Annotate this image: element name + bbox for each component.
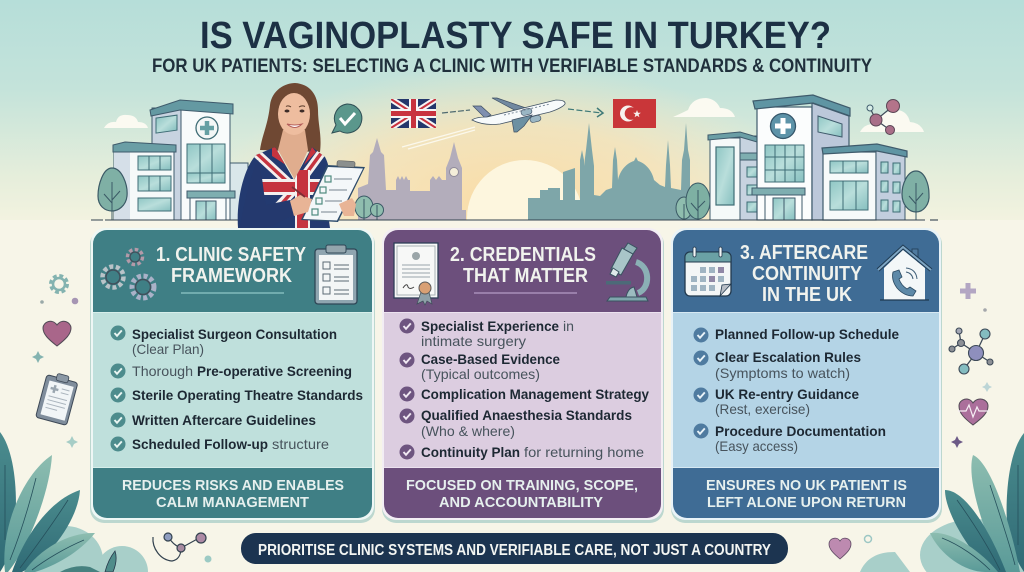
dashed arrow right — [568, 108, 603, 117]
item 3: Sterile Operating Theatre Standards — [132, 387, 363, 403]
dashed route left — [442, 110, 470, 113]
item 3: Complication Management Strategy — [421, 386, 649, 402]
face — [278, 93, 310, 135]
item 2: Pre-operative Screening — [197, 363, 352, 379]
sparkle — [982, 382, 992, 392]
right hospital — [673, 95, 929, 220]
pen — [292, 187, 305, 197]
panel shadow — [671, 230, 942, 523]
Big Ben clock — [450, 168, 458, 176]
item 1: in — [563, 318, 574, 334]
clipboard — [301, 161, 365, 222]
side block — [228, 163, 248, 220]
UK flag — [391, 99, 436, 128]
icon: small heart — [829, 538, 851, 559]
icon: gear — [52, 276, 66, 292]
panel border — [91, 228, 374, 520]
right side decorations — [949, 283, 993, 448]
fringe — [278, 88, 311, 114]
panel body — [93, 310, 372, 470]
icon: calendar — [685, 247, 731, 296]
heading: CONTINUITY — [752, 263, 863, 285]
skyline scene — [355, 124, 710, 220]
woman with clipboard — [236, 83, 365, 230]
panel header — [384, 230, 661, 312]
heading — [450, 244, 596, 287]
icon: checklist clipboard — [315, 245, 357, 304]
jacket — [236, 145, 332, 230]
small trees near London — [355, 196, 384, 220]
item 1: (Clear Plan) — [132, 341, 204, 357]
checklist — [694, 326, 899, 454]
panel footer: REDUCES RISKS AND ENABLES — [122, 477, 344, 494]
icon: heart with pulse — [958, 399, 989, 425]
item 4 — [400, 407, 632, 439]
bottom banner — [241, 533, 788, 564]
center tower — [757, 107, 812, 220]
low block — [114, 148, 174, 220]
cloud — [673, 98, 735, 117]
item 4 — [694, 423, 886, 454]
panel border — [382, 228, 663, 520]
title: IS VAGINOPLASTY SAFE IN TURKEY? — [200, 15, 831, 57]
panel footer: FOCUSED ON TRAINING, SCOPE, — [406, 477, 638, 494]
panel footer — [93, 468, 372, 518]
cross sign — [196, 117, 218, 139]
heading — [740, 242, 868, 306]
panel body — [673, 310, 939, 470]
right wing — [823, 152, 876, 220]
panel body — [384, 310, 661, 470]
tree pair near Istanbul — [676, 183, 710, 220]
heading: 1. CLINIC SAFETY — [156, 244, 307, 266]
icon: gears — [102, 250, 154, 298]
item 4: (Who & where) — [421, 423, 515, 439]
sun — [467, 160, 580, 220]
item 3: UK Re-entry Guidance — [715, 386, 859, 402]
cross sign — [770, 114, 796, 138]
cloud — [104, 115, 148, 128]
icon: molecule — [949, 328, 993, 374]
sparkle — [66, 436, 78, 448]
item 4: Written Aftercare Guidelines — [132, 412, 316, 428]
tall block — [152, 108, 182, 220]
item 1: Specialist Surgeon Consultation — [132, 326, 337, 342]
item 1: Specialist Experience — [421, 318, 559, 334]
airplane — [472, 98, 565, 132]
panel: aftercare continuity — [671, 228, 942, 523]
icon: microscope — [606, 243, 648, 301]
panel shadow — [90, 230, 375, 523]
subtitle: FOR UK PATIENTS: SELECTING A CLINIC WITH VERIFIABLE STANDARDS & CONTINUITY — [152, 56, 872, 77]
item 5 — [110, 436, 329, 452]
item 1: intimate surgery — [421, 333, 526, 349]
icon: heart — [43, 321, 71, 346]
sparkle — [951, 436, 963, 448]
panel footer: CALM MANAGEMENT — [156, 494, 309, 511]
panel: clinic safety framework — [90, 228, 375, 523]
item 2: Case-Based Evidence — [421, 351, 560, 367]
hair — [260, 83, 321, 152]
glass facade — [187, 144, 225, 183]
tree — [98, 168, 127, 220]
heading: 3. AFTERCARE — [740, 242, 868, 264]
eyes and smile — [284, 106, 305, 128]
panel: credentials that matter — [382, 228, 664, 523]
cloud with molecule — [860, 100, 924, 134]
plus — [960, 283, 976, 299]
item 1 — [110, 326, 337, 357]
item 2: Clear Escalation Rules — [715, 349, 861, 365]
panel footer: AND ACCOUNTABILITY — [439, 494, 603, 511]
item 2 — [694, 349, 861, 381]
item 1 — [400, 318, 574, 349]
icon: house with phone — [878, 247, 931, 300]
icon: stethoscope — [153, 533, 206, 561]
item 4: (Easy access) — [715, 438, 798, 454]
item 2: (Symptoms to watch) — [715, 365, 850, 381]
hands — [290, 195, 356, 216]
panel border — [671, 228, 941, 520]
panel header — [93, 230, 372, 312]
heading: FRAMEWORK — [171, 265, 292, 287]
heading: IN THE UK — [762, 284, 853, 306]
item 4: Qualified Anaesthesia Standards — [421, 407, 632, 423]
item 1: Planned Follow-up Schedule — [715, 326, 899, 342]
heading: THAT MATTER — [463, 265, 588, 287]
item 5: Scheduled Follow-up — [132, 436, 268, 452]
sparkle — [32, 351, 44, 363]
heading: 2. CREDENTIALS — [450, 244, 596, 266]
panel footer: ENSURES NO UK PATIENT IS — [706, 477, 907, 494]
left wing — [710, 138, 740, 220]
entrance — [752, 188, 805, 220]
panel header — [673, 230, 939, 312]
panel footer — [673, 468, 939, 518]
heading — [156, 244, 307, 287]
left side decorations — [32, 276, 79, 448]
item 5: for returning home — [524, 444, 644, 460]
item 2 — [110, 363, 352, 379]
item 5: structure — [272, 436, 329, 452]
panel shadow — [382, 230, 664, 523]
bottom banner: PRIORITISE CLINIC SYSTEMS AND VERIFIABLE CARE, NOT JUST A COUNTRY — [258, 542, 771, 559]
item 2 — [400, 351, 560, 382]
left hospital — [98, 100, 248, 220]
left foliage — [0, 432, 148, 572]
entrance — [187, 191, 235, 220]
icon: medical clipboard — [36, 371, 79, 425]
item 3 — [694, 386, 859, 417]
contrails — [402, 127, 475, 149]
Turkish flag — [613, 99, 656, 128]
item 5: Continuity Plan — [421, 444, 520, 460]
ground line — [91, 219, 938, 221]
item 3: (Rest, exercise) — [715, 401, 810, 417]
item 5 — [400, 444, 644, 460]
checklist — [400, 318, 649, 460]
right foliage — [860, 433, 1024, 572]
panel footer: LEFT ALONE UPON RETURN — [707, 494, 906, 511]
neck — [278, 130, 308, 180]
item 4: Procedure Documentation — [715, 423, 886, 439]
tree — [902, 171, 929, 220]
glass facade — [765, 145, 804, 182]
London skyline — [358, 138, 466, 220]
item 2: Thorough — [132, 363, 193, 379]
left sleeve — [240, 160, 295, 228]
item 2: (Typical outcomes) — [421, 366, 540, 382]
panel footer — [384, 468, 661, 518]
icon: certificate — [394, 243, 438, 305]
Istanbul skyline — [528, 123, 700, 220]
checklist — [110, 326, 363, 452]
speech bubble check — [332, 104, 362, 133]
